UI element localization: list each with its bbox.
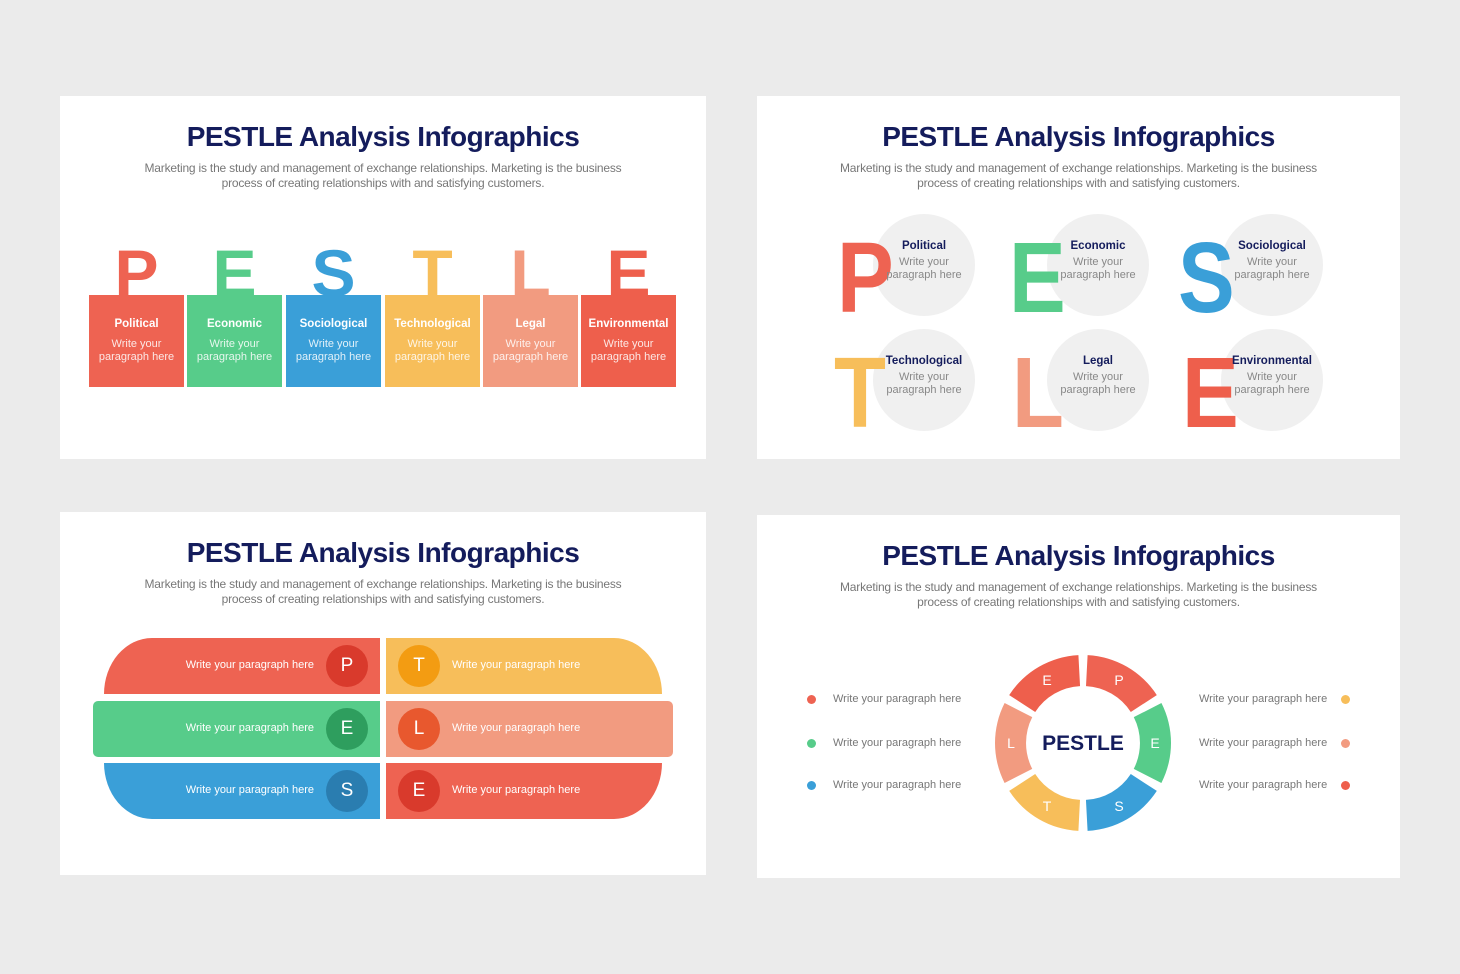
ring chart: P bbox=[1114, 672, 1124, 688]
circle texts: Legal bbox=[1083, 355, 1113, 367]
subtitle: process of creating relationships with and satisfying customers. bbox=[917, 176, 1240, 190]
row: L bbox=[386, 701, 673, 757]
row: T bbox=[386, 638, 662, 694]
row: E: Write your paragraph here bbox=[452, 784, 580, 796]
circle texts: paragraph here bbox=[886, 384, 962, 396]
circle texts: Political bbox=[902, 240, 946, 252]
big letters: E bbox=[1182, 337, 1239, 449]
ring chart: L bbox=[1007, 735, 1015, 751]
box: sociological bbox=[286, 295, 381, 387]
box: environmental bbox=[581, 295, 676, 387]
title: PESTLE Analysis Infographics bbox=[187, 537, 579, 568]
row: E: E bbox=[341, 718, 353, 739]
circle texts: Write your bbox=[1073, 256, 1123, 268]
left list: Write your paragraph here bbox=[833, 737, 961, 749]
ring chart: S bbox=[1114, 798, 1124, 814]
row: E: Write your paragraph here bbox=[186, 722, 314, 734]
left list: Write your paragraph here bbox=[833, 693, 961, 705]
box: political: paragraph here bbox=[99, 351, 174, 363]
circle texts: paragraph here bbox=[886, 269, 962, 281]
circle texts: Sociological bbox=[1238, 240, 1306, 252]
box: political: Political bbox=[114, 318, 159, 330]
box: environmental: Environmental bbox=[589, 318, 668, 330]
row: T: Write your paragraph here bbox=[452, 659, 580, 671]
box: legal: paragraph here bbox=[493, 351, 568, 363]
left list: Write your paragraph here bbox=[833, 779, 961, 791]
box: technological bbox=[385, 295, 480, 387]
title: PESTLE Analysis Infographics bbox=[882, 540, 1275, 571]
box: sociological: paragraph here bbox=[296, 351, 371, 363]
right list bbox=[1199, 693, 1350, 791]
row: L: Write your paragraph here bbox=[452, 722, 580, 734]
box: sociological: Write your bbox=[309, 338, 358, 350]
circle texts: Write your bbox=[1247, 371, 1297, 383]
panel: ring bbox=[757, 515, 1400, 878]
subtitle bbox=[840, 580, 1317, 608]
ring chart: E bbox=[1042, 672, 1052, 688]
row: P bbox=[104, 638, 380, 694]
subtitle: Marketing is the study and management of exchange relationships. Marketing is the business bbox=[145, 161, 621, 175]
subtitle: process of creating relationships with and satisfying customers. bbox=[222, 592, 544, 606]
big letters: L bbox=[1012, 337, 1064, 449]
row: E bbox=[93, 701, 380, 757]
box: technological: Write your bbox=[408, 338, 457, 350]
box: technological: Technological bbox=[394, 318, 471, 330]
circle texts bbox=[886, 240, 1312, 396]
big letters: P bbox=[837, 222, 894, 334]
circle texts: Write your bbox=[899, 371, 949, 383]
circles bbox=[873, 214, 1323, 431]
subtitle bbox=[840, 161, 1317, 190]
panel: letter blocks bbox=[60, 96, 706, 459]
circle texts: paragraph here bbox=[1234, 384, 1310, 396]
circle texts: Environmental bbox=[1232, 355, 1312, 367]
box: legal bbox=[483, 295, 578, 387]
row: P: Write your paragraph here bbox=[186, 659, 314, 671]
row: E: E bbox=[413, 780, 425, 801]
right list: Write your paragraph here bbox=[1199, 779, 1327, 791]
circle texts: paragraph here bbox=[1234, 269, 1310, 281]
circle texts: Write your bbox=[899, 256, 949, 268]
ring chart: E bbox=[1150, 735, 1160, 751]
row: T: T bbox=[413, 655, 425, 676]
box: environmental: Write your bbox=[604, 338, 653, 350]
subtitle: Marketing is the study and management of exchange relationships. Marketing is the business bbox=[840, 161, 1317, 175]
box: sociological: Sociological bbox=[300, 318, 367, 330]
box: economic: Write your bbox=[210, 338, 259, 350]
subtitle: process of creating relationships with and satisfying customers. bbox=[222, 176, 544, 190]
box: legal: Write your bbox=[506, 338, 555, 350]
row: P: P bbox=[341, 655, 353, 676]
ring chart: PESTLE bbox=[1042, 732, 1124, 755]
circle texts: Economic bbox=[1071, 240, 1125, 252]
row: S: Write your paragraph here bbox=[186, 784, 314, 796]
box: economic: paragraph here bbox=[197, 351, 272, 363]
row: E bbox=[386, 763, 662, 819]
circle texts: paragraph here bbox=[1060, 384, 1136, 396]
box: political: Write your bbox=[112, 338, 161, 350]
box: economic bbox=[187, 295, 282, 387]
letters bbox=[114, 240, 651, 300]
subtitle: process of creating relationships with and satisfying customers. bbox=[917, 594, 1240, 608]
circle texts: Technological bbox=[886, 355, 962, 367]
row: L: L bbox=[414, 718, 424, 739]
row: S: S bbox=[341, 780, 353, 801]
right list: Write your paragraph here bbox=[1199, 693, 1327, 705]
panel: rounded rows bbox=[60, 512, 706, 875]
right list: Write your paragraph here bbox=[1199, 737, 1327, 749]
circle texts: Write your bbox=[1073, 371, 1123, 383]
big letters: T bbox=[834, 337, 886, 449]
circle texts: Write your bbox=[1247, 256, 1297, 268]
left list bbox=[807, 693, 961, 791]
ring chart: T bbox=[1043, 798, 1052, 814]
circle texts: paragraph here bbox=[1060, 269, 1136, 281]
big letters: S bbox=[1178, 222, 1235, 334]
panel: letters with circles bbox=[757, 96, 1400, 459]
subtitle: Marketing is the study and management of exchange relationships. Marketing is the business bbox=[145, 577, 621, 591]
subtitle: Marketing is the study and management of exchange relationships. Marketing is the business bbox=[840, 580, 1317, 594]
big letters: E bbox=[1009, 222, 1066, 334]
subtitle bbox=[145, 161, 622, 190]
row: S bbox=[104, 763, 380, 819]
title: PESTLE Analysis Infographics bbox=[882, 121, 1275, 152]
box: environmental: paragraph here bbox=[591, 351, 666, 363]
big letters bbox=[834, 222, 1239, 449]
title: PESTLE Analysis Infographics bbox=[187, 121, 579, 152]
box: economic: Economic bbox=[207, 318, 262, 330]
box: technological: paragraph here bbox=[395, 351, 470, 363]
box: political bbox=[89, 295, 184, 387]
ring chart bbox=[995, 655, 1171, 831]
box: legal: Legal bbox=[515, 318, 546, 330]
subtitle bbox=[145, 577, 622, 606]
